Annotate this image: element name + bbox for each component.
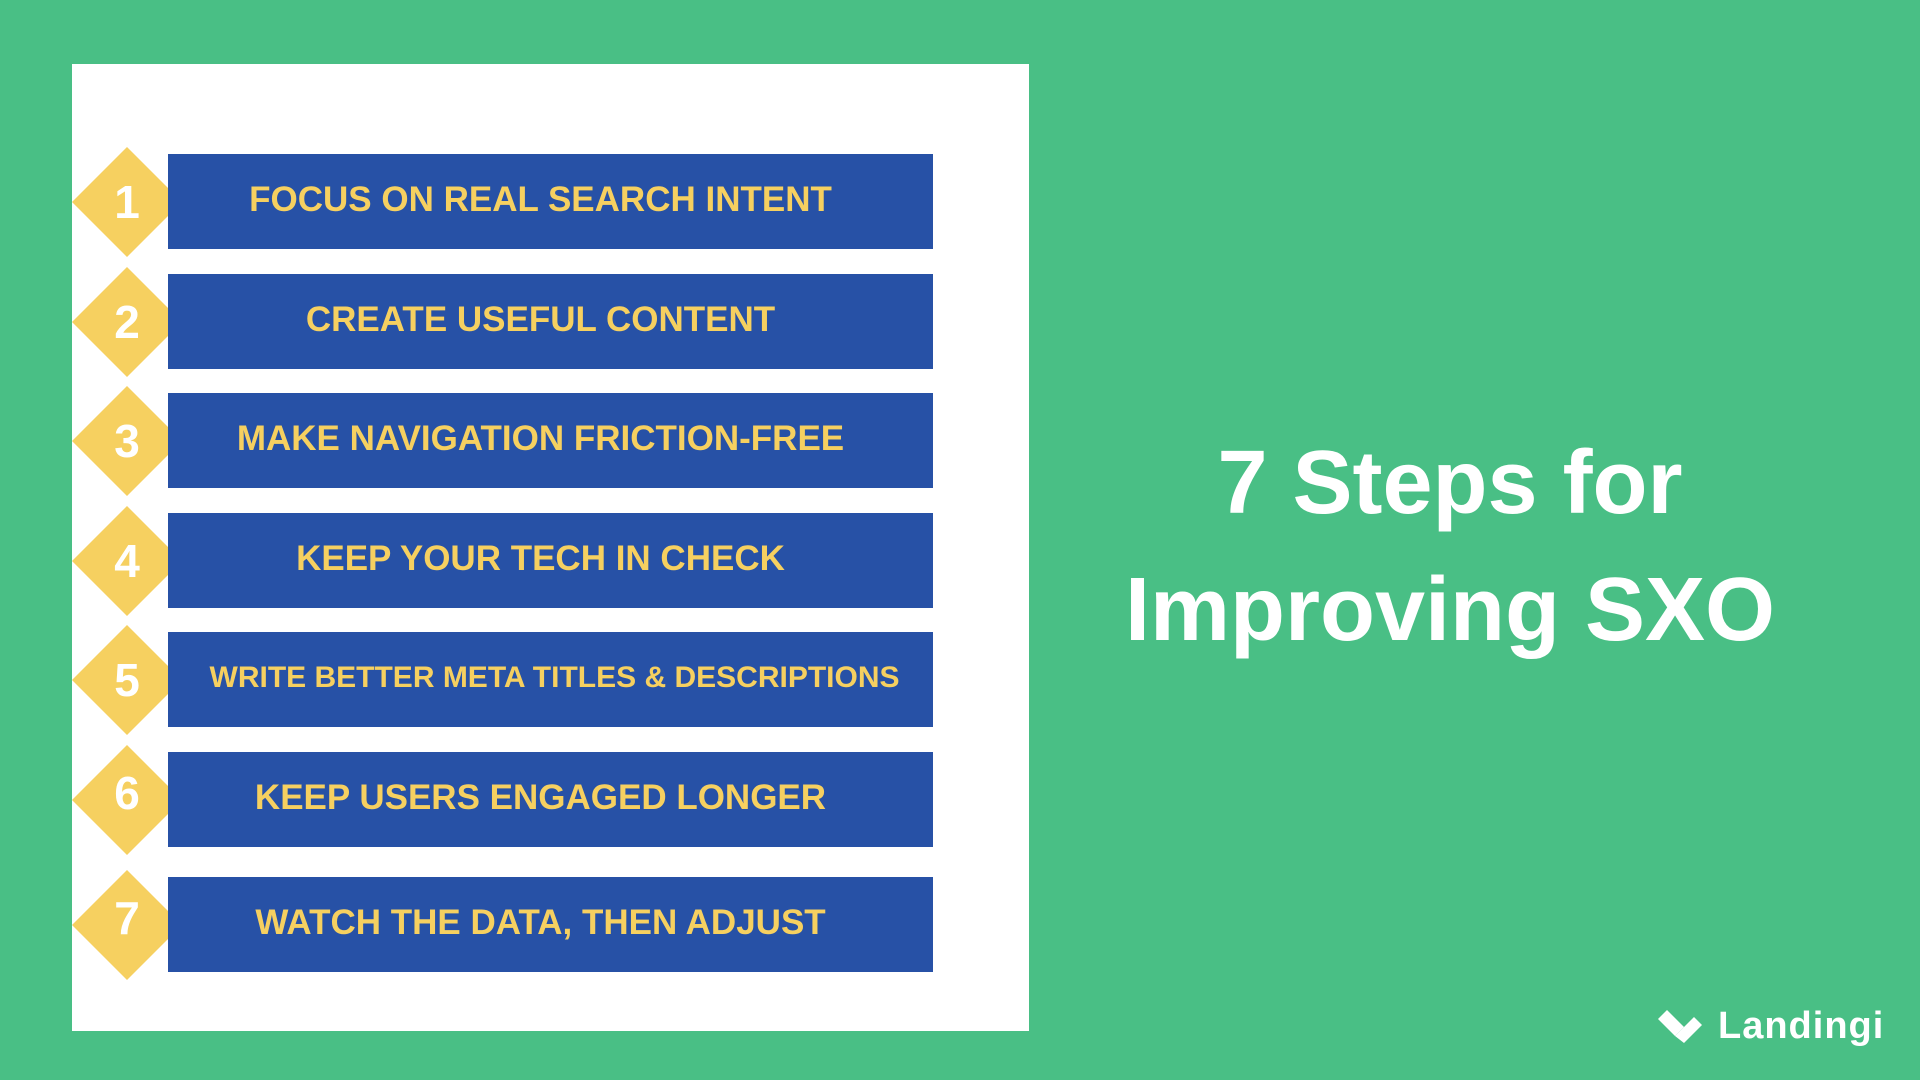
step 2: CREATE USEFUL CONTENT — [306, 300, 775, 338]
step 5 — [72, 625, 933, 735]
step 2: 2 — [114, 296, 140, 348]
panel: steps — [72, 64, 1029, 1031]
title — [1125, 433, 1775, 660]
step 7: 7 — [114, 892, 140, 944]
step 5: 5 — [114, 654, 140, 706]
step 6 — [72, 745, 933, 855]
step 3 — [72, 386, 933, 496]
step 1: 1 — [114, 176, 140, 228]
step 1: FOCUS ON REAL SEARCH INTENT — [249, 180, 832, 218]
step 4: 4 — [114, 535, 140, 587]
step 3: 3 — [114, 415, 140, 467]
step 2 — [72, 267, 933, 377]
title: Improving SXO — [1125, 560, 1775, 660]
title: 7 Steps for — [1217, 433, 1683, 533]
step 6: 6 — [114, 767, 140, 819]
step 6: KEEP USERS ENGAGED LONGER — [255, 778, 826, 816]
step 1 — [72, 147, 933, 257]
step 4: KEEP YOUR TECH IN CHECK — [296, 538, 785, 578]
step 4 — [72, 506, 933, 616]
step 5: WRITE BETTER META TITLES & DESCRIPTIONS — [210, 660, 900, 694]
logo: Landingi: Landingi — [1718, 1005, 1884, 1047]
step 7: WATCH THE DATA, THEN ADJUST — [255, 902, 826, 942]
step 7 — [72, 870, 933, 980]
step 3: MAKE NAVIGATION FRICTION-FREE — [237, 418, 844, 458]
